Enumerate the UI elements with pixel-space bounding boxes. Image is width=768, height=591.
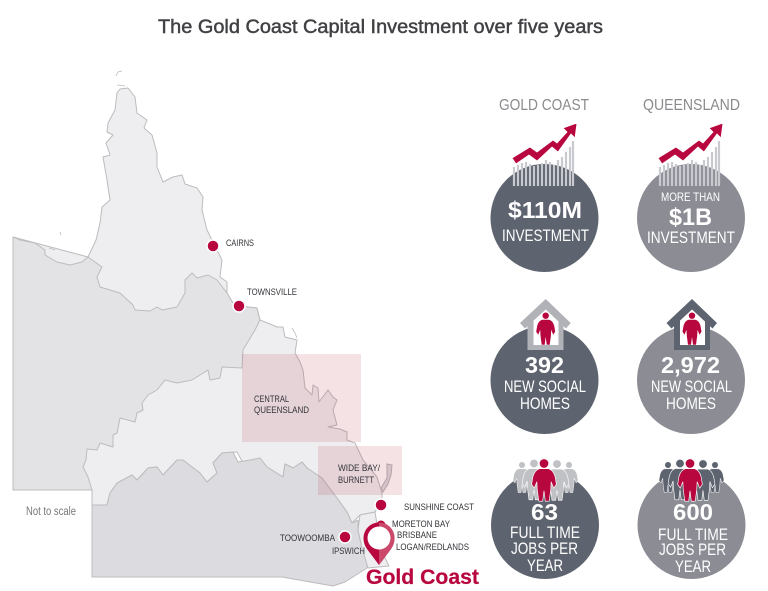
labels: Moreton Bay, Brisbane, Logan Redlands: LOGAN/REDLANDS xyxy=(396,542,469,553)
marker: Townsville: TOWNSVILLE xyxy=(247,287,297,298)
label: Central Queensland: QUEENSLAND xyxy=(254,405,309,416)
icon: rising arrow xyxy=(658,123,723,164)
marker: Moreton Bay dot xyxy=(376,520,386,530)
stat: Queensland jobs: YEAR xyxy=(675,557,711,576)
icon: group of people xyxy=(513,459,578,501)
region highlight: Central Queensland xyxy=(242,354,361,442)
labels: Moreton Bay, Brisbane, Logan Redlands: BRISBANE xyxy=(397,530,437,541)
label: Wide Bay Burnett: BURNETT xyxy=(338,475,374,486)
stat: Queensland social homes: NEW SOCIAL xyxy=(651,377,732,396)
label: Ipswich: IPSWICH xyxy=(332,546,365,557)
column heading: Queensland: QUEENSLAND xyxy=(643,97,740,114)
label: Wide Bay Burnett: WIDE BAY/ xyxy=(338,463,380,474)
icon: house with person xyxy=(520,299,571,350)
icon: Gold Coast pin xyxy=(364,522,394,565)
stat: Gold Coast social homes: NEW SOCIAL xyxy=(504,377,586,396)
map: northern islands xyxy=(49,71,297,338)
stat: Gold Coast investment xyxy=(490,123,598,272)
label: Wide Bay Burnett xyxy=(338,463,380,486)
marker: Sunshine Coast: SUNSHINE COAST xyxy=(404,502,474,513)
stat: Gold Coast investment: $110M xyxy=(508,197,582,223)
stat: Queensland investment: $1B xyxy=(669,204,712,231)
stat: Gold Coast jobs: YEAR xyxy=(527,556,563,575)
icon: rising bars xyxy=(514,141,573,186)
icon: group of people xyxy=(659,459,724,501)
label: Central Queensland: CENTRAL xyxy=(254,394,290,405)
stat: Gold Coast social homes: 392 xyxy=(525,352,564,378)
stat: Queensland jobs: FULL TIME xyxy=(658,525,728,544)
stat: Queensland investment: MORE THAN xyxy=(661,190,720,204)
stat: Queensland social homes: 2,972 xyxy=(661,352,720,378)
map of Queensland xyxy=(13,71,479,589)
label: Gold Coast: Gold Coast xyxy=(366,566,479,589)
map: south-east corner xyxy=(358,512,389,568)
icon: house with person xyxy=(666,299,717,350)
map: Fraser Island xyxy=(381,464,392,492)
stat: Queensland social homes xyxy=(637,299,745,434)
stat: Queensland social homes: HOMES xyxy=(666,394,716,413)
title: The Gold Coast Capital Investment over five years xyxy=(158,17,603,38)
stat: Gold Coast jobs: 63 xyxy=(531,499,558,525)
stat: Gold Coast investment: INVESTMENT xyxy=(502,226,589,245)
stat: Gold Coast jobs: JOBS PER xyxy=(511,539,578,558)
icon: rising bars xyxy=(660,141,719,186)
stat: Gold Coast social homes xyxy=(490,299,598,434)
icon: rising arrow xyxy=(512,123,577,164)
map: southern region xyxy=(92,452,368,586)
stat: Queensland jobs: 600 xyxy=(673,499,713,525)
stat: Queensland investment: INVESTMENT xyxy=(647,228,735,247)
stat: Queensland investment xyxy=(637,123,745,272)
label: Central Queensland xyxy=(254,394,309,416)
marker: Sunshine Coast xyxy=(375,499,474,513)
marker: Cairns: CAIRNS xyxy=(226,238,254,249)
map label: not to scale: Not to scale xyxy=(26,506,76,518)
labels: Moreton Bay, Brisbane, Logan Redlands xyxy=(392,519,469,553)
map: northern and central region xyxy=(13,88,382,523)
stat: Queensland jobs: JOBS PER xyxy=(659,540,726,559)
labels: Moreton Bay, Brisbane, Logan Redlands: MORETON BAY xyxy=(392,519,450,530)
region highlight: Wide Bay / Burnett xyxy=(318,446,402,495)
stat: Queensland jobs xyxy=(638,459,746,579)
marker: Cairns xyxy=(207,238,254,252)
column heading: Gold Coast: GOLD COAST xyxy=(499,97,589,114)
stat: Gold Coast jobs xyxy=(491,459,599,579)
stat: Gold Coast social homes: HOMES xyxy=(520,394,570,413)
marker: Toowoomba: TOOWOOMBA xyxy=(280,533,335,544)
marker: Townsville xyxy=(233,287,297,312)
map: north-west region xyxy=(13,237,260,490)
stat: Gold Coast jobs: FULL TIME xyxy=(510,523,580,542)
